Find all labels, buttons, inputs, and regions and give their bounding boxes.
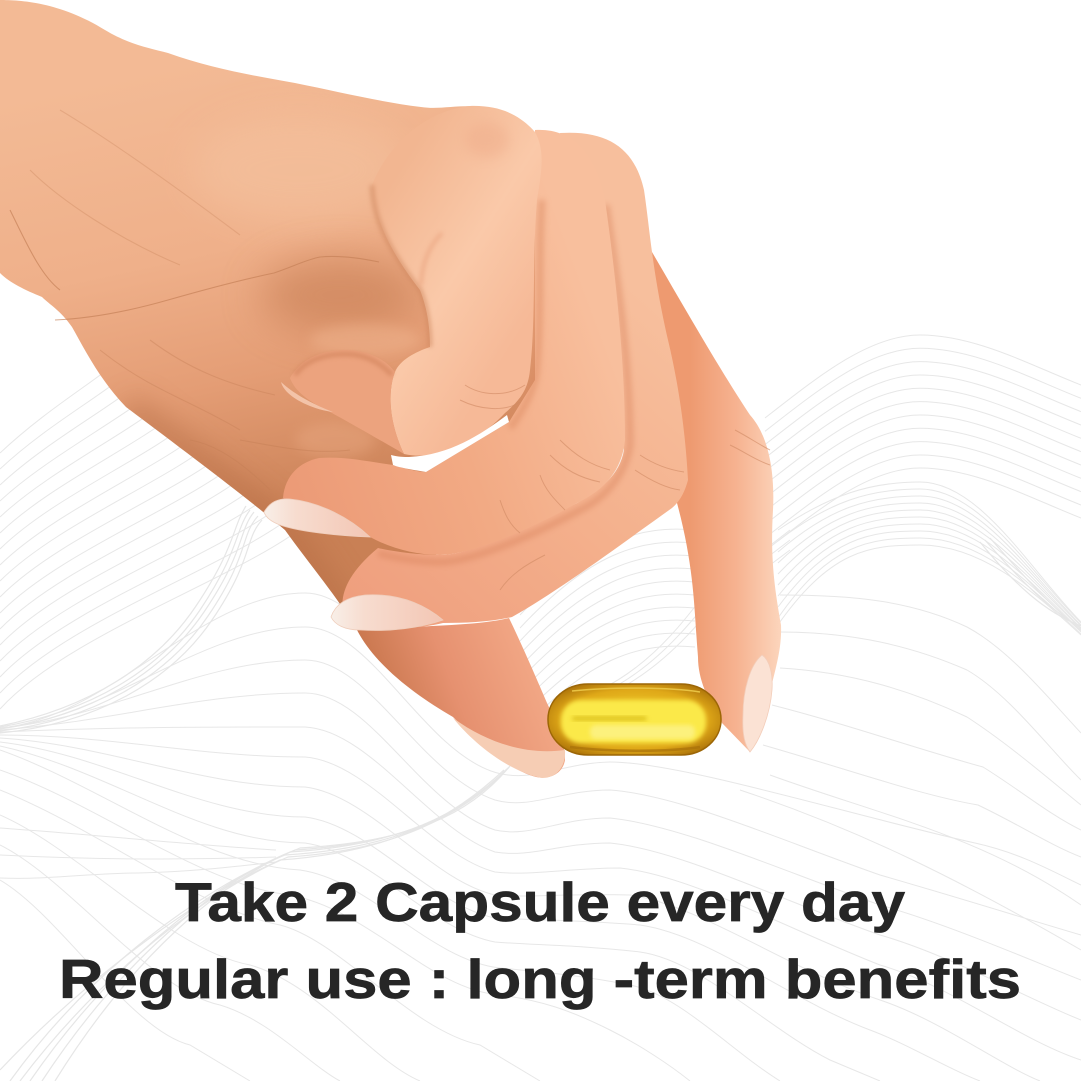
index finger: [343, 133, 688, 628]
middle finger: [283, 130, 625, 555]
knuckle wrinkles: [460, 385, 770, 590]
hand: [0, 0, 781, 778]
nail: index finger: [331, 595, 443, 631]
capsule inner glow: [561, 700, 706, 743]
middle finger shadow along fist: [510, 200, 542, 428]
heading line 1: Take 2 Capsule every day: [175, 871, 905, 933]
curled fingertip top shadow: [295, 354, 392, 375]
nail: pinching finger: [743, 655, 772, 752]
heading line 2: Regular use : long -term benefits: [59, 948, 1021, 1010]
capsule rim line: [572, 688, 700, 692]
capsule centre stripe: [572, 716, 647, 721]
index finger shadow along middle finger: [378, 205, 630, 562]
capsule: [548, 684, 721, 755]
fist fold shading: [372, 185, 430, 347]
gap between fist and fingers: [391, 415, 509, 472]
capsule highlight: [590, 725, 695, 739]
curled fingertip nail: [281, 382, 333, 412]
pinching finger: [640, 240, 781, 752]
thumb nail: [453, 718, 565, 778]
palm shading: [126, 115, 420, 640]
palm and wrist creases: [10, 110, 379, 490]
background wave ribbons: [0, 506, 1081, 1081]
fist: [372, 106, 542, 456]
capsule lower rim: [570, 747, 700, 751]
nail: middle finger: [264, 499, 370, 537]
capsule body: [548, 684, 721, 755]
curled fingertip: [290, 350, 404, 454]
thumb: [357, 618, 565, 778]
wrist and palm: [0, 0, 560, 628]
background wave lines: [0, 335, 1081, 1081]
